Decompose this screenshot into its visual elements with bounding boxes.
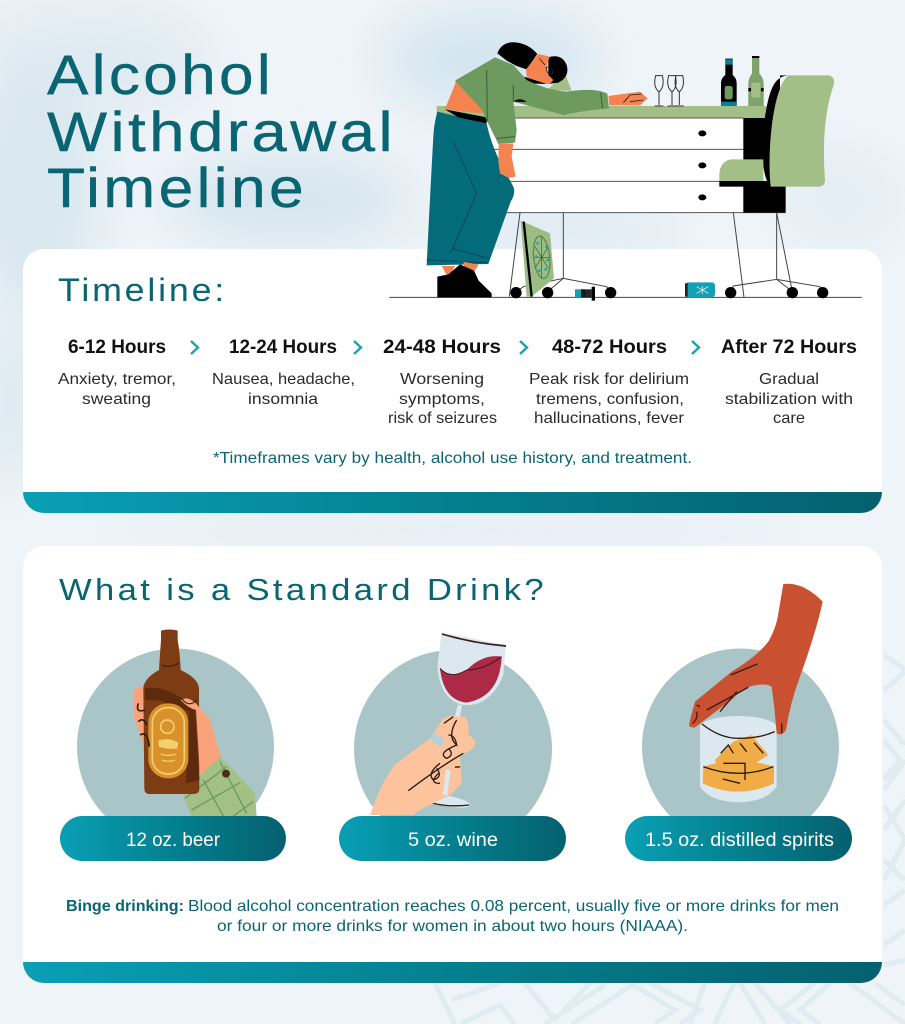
spilled cup — [575, 287, 595, 301]
cushion — [547, 73, 572, 91]
step: 24-48 hours — [383, 337, 501, 427]
step: 48-72 hours: tremens, confusion, — [536, 391, 684, 408]
step: 6-12 hours: 6-12 Hours — [68, 337, 166, 358]
heading: timeline: Timeline: — [58, 272, 227, 308]
step: after 72 hours — [721, 337, 857, 427]
binge drinking note: or four or more drinks for women in about two hours (NIAAA). — [217, 918, 688, 935]
heading: standard drink: What is a Standard Drink? — [59, 572, 547, 607]
circles behind drinks — [77, 648, 839, 816]
label pill: wine: 5 oz. wine — [408, 830, 498, 851]
binge drinking note — [66, 898, 839, 935]
icon: whisky glass with hand — [689, 584, 823, 802]
panel: standard drink — [23, 546, 882, 983]
desk wheels — [510, 287, 828, 298]
arrow: step 4 to 5 — [692, 341, 699, 354]
step: after 72 hours: care — [773, 410, 805, 427]
background: mandala line pattern — [435, 655, 905, 1024]
illustration: woman slumped over desk — [389, 42, 862, 301]
step: 12-24 hours — [212, 337, 355, 408]
step: after 72 hours: After 72 Hours — [721, 337, 857, 358]
icon: wine glass in hand — [370, 633, 506, 815]
title: Alcohol — [47, 43, 274, 106]
dark bottle — [721, 59, 737, 106]
footnote: *Timeframes vary by health, alcohol use history, and treatment. — [213, 450, 692, 467]
step: 48-72 hours: hallucinations, fever — [534, 410, 685, 427]
step: after 72 hours: stabilization with — [725, 391, 853, 408]
floor line and desk legs — [389, 213, 862, 297]
icon: beer bottle in hand — [134, 629, 257, 816]
panel band: timeline — [23, 492, 882, 513]
step: 12-24 hours: Nausea, headache, — [212, 371, 355, 388]
step: 12-24 hours: insomnia — [248, 391, 318, 408]
binge drinking note: Blood alcohol concentration reaches 0.08 percent, usually five or more drinks for men — [188, 898, 839, 915]
arrow: step 2 to 3 — [354, 341, 361, 354]
step: 24-48 hours: 24-48 Hours — [383, 337, 501, 358]
step: after 72 hours: Gradual — [759, 371, 819, 388]
step: 24-48 hours: symptoms, — [399, 391, 485, 408]
title: Timeline — [47, 156, 307, 219]
arrow: step 1 to 2 — [191, 341, 198, 354]
fallen can — [685, 282, 715, 297]
binge drinking note: Binge drinking: — [66, 898, 184, 915]
chair — [719, 75, 834, 187]
title: Withdrawal — [47, 100, 396, 163]
label pill: spirits — [625, 816, 852, 861]
panel band: standard drink — [23, 962, 882, 983]
label pill: beer: 12 oz. beer — [126, 830, 221, 851]
label pill: wine — [339, 816, 566, 861]
step: 24-48 hours: risk of seizures — [388, 410, 497, 427]
arrow: step 3 to 4 — [520, 341, 527, 354]
hand on desk — [608, 92, 648, 105]
step: 48-72 hours: Peak risk for delirium — [529, 371, 689, 388]
head — [497, 42, 567, 84]
hanging hand — [498, 143, 516, 178]
label pill: spirits: 1.5 oz. distilled spirits — [645, 830, 834, 851]
leaning board — [521, 221, 554, 297]
jacket — [455, 57, 609, 144]
step: 6-12 hours: sweating — [82, 391, 151, 408]
green bottle — [748, 56, 764, 106]
panel: timeline — [23, 249, 882, 513]
step: 6-12 hours — [58, 337, 176, 408]
title — [47, 43, 396, 219]
shoes and socks — [437, 262, 492, 297]
step: 48-72 hours — [529, 337, 689, 427]
step: 48-72 hours: 48-72 Hours — [552, 337, 667, 358]
wine glasses — [655, 76, 684, 106]
desk — [437, 106, 786, 213]
torso and belt — [445, 82, 487, 123]
step: 24-48 hours: Worsening — [400, 371, 484, 388]
label pill: beer — [60, 816, 286, 861]
step: 6-12 hours: Anxiety, tremor, — [58, 371, 176, 388]
step: 12-24 hours: 12-24 Hours — [229, 337, 337, 358]
trousers — [427, 112, 514, 265]
